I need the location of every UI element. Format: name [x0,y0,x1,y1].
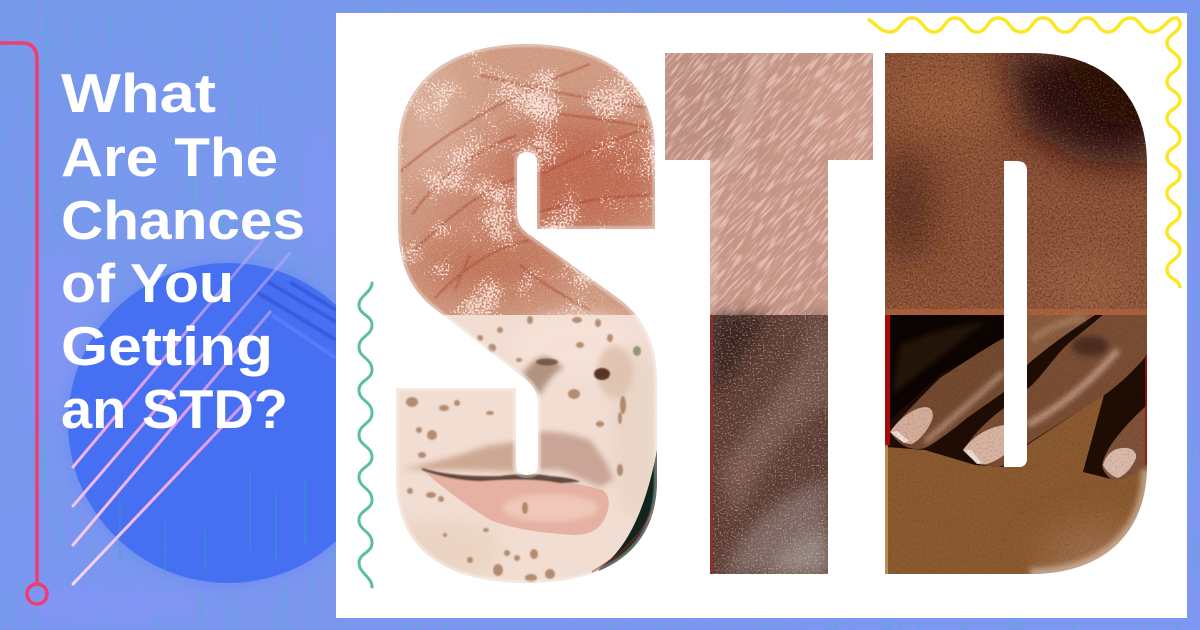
letter S with skin photos [396,44,657,583]
title: What [61,62,216,124]
diagonal stripes [73,240,290,584]
finger one [890,338,1004,449]
title: an STD? [61,378,288,440]
red timeline line with ring [0,43,47,604]
letter D with skin photos [885,53,1147,574]
S lower: freckled face with lips [380,315,665,590]
D upper: brown shoulder skin [885,53,1147,315]
white panel [336,13,1187,618]
S soft edge [396,44,657,583]
upper finger segment [1027,315,1095,365]
title [61,62,305,440]
letter T with skin photos [665,53,873,574]
finger two [963,315,1147,467]
finger three [1102,405,1147,481]
title: Getting [61,315,273,377]
title: Chances [61,189,305,251]
yellow wavy border [868,18,1180,288]
title: of You [61,252,234,314]
D lower: hand with nails [885,314,1147,574]
title: Are The [61,126,278,188]
T upper: ridged pale skin [665,53,873,315]
blue textured circle [68,263,388,583]
T lower: dark brown skin [705,315,835,577]
green wavy line [359,283,372,587]
S upper: flaky skin [390,40,665,316]
